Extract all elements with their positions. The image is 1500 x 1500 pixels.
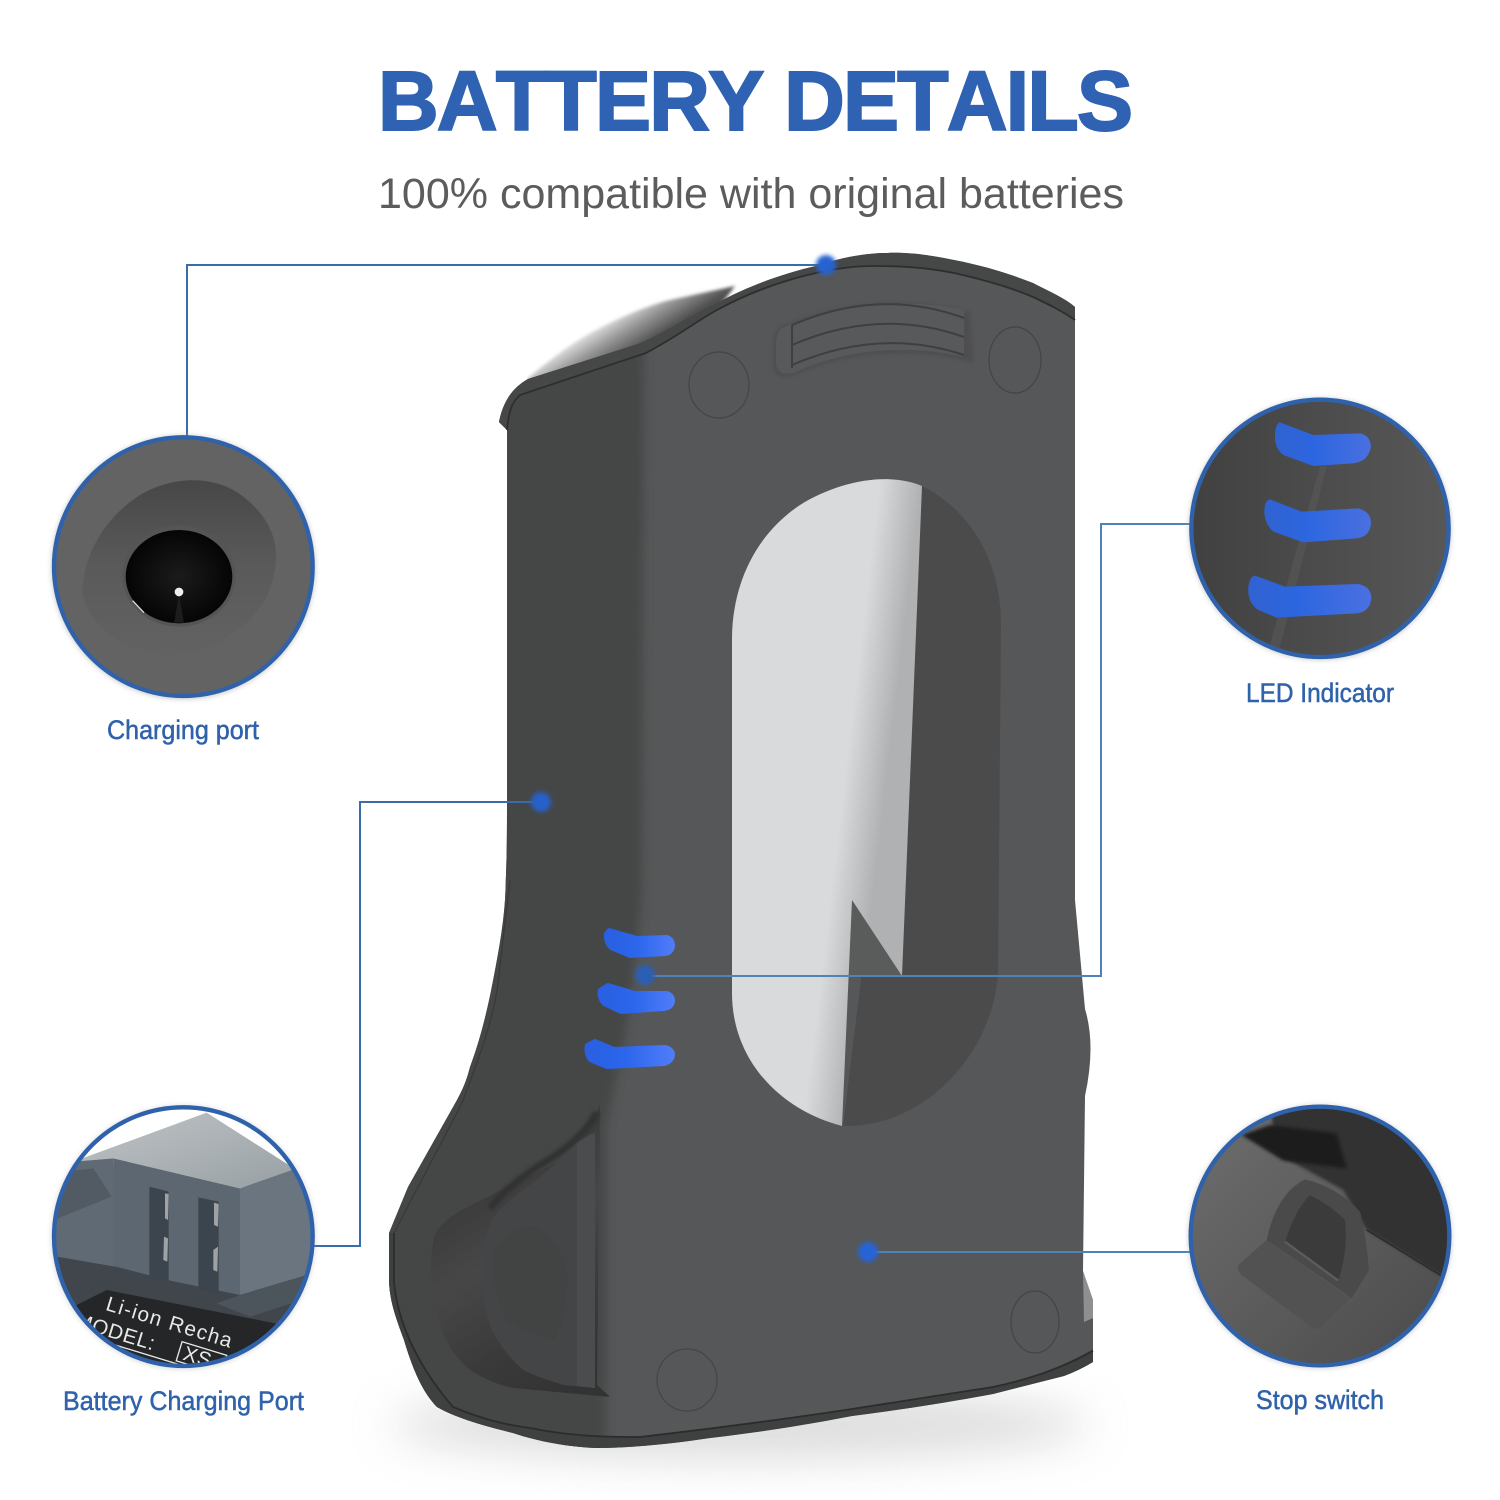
grip recess [431, 1105, 610, 1397]
detail circle: battery charging port: V [95, 1344, 115, 1370]
slot left [149, 1187, 169, 1281]
lower right step [217, 1276, 304, 1316]
switch loop [1267, 1179, 1369, 1298]
left block [50, 1158, 115, 1267]
grip inner arc [494, 1227, 567, 1340]
label: battery charging port: Battery Charging Port [63, 1386, 304, 1416]
hotspot dot: top [816, 255, 836, 275]
screw covers [657, 327, 1059, 1411]
label: stop switch: Stop switch [1256, 1385, 1384, 1415]
upper dark housing [1270, 1108, 1448, 1276]
connector: front to stop switch [868, 1251, 1192, 1253]
base line [394, 1233, 1093, 1437]
grip shadow [490, 1112, 597, 1208]
connector: LED bars to LED indicator [645, 524, 1192, 976]
base band [389, 1278, 1093, 1448]
connector: side to battery charging port [312, 802, 540, 1246]
detail circle: stop switch [1187, 1103, 1463, 1370]
LED bars [586, 930, 673, 1067]
contacts housing top [73, 1113, 297, 1188]
window notch [846, 900, 902, 976]
detail circle: battery charging port [50, 1104, 317, 1371]
hotspot dot: side [531, 792, 551, 812]
label: LED indicator: LED Indicator [1246, 678, 1394, 708]
release tab [773, 303, 974, 377]
right lower bevel [1083, 1271, 1093, 1322]
detail circle: LED indicator [1187, 397, 1453, 663]
detail circle: charging port [50, 433, 317, 700]
connector: top rim to charging port [187, 265, 826, 437]
floor shadow [390, 1390, 1090, 1460]
side line [394, 880, 510, 1233]
detail circle: battery charging port: Li-ion Recha [103, 1292, 236, 1353]
detail circle: battery charging port: XS [180, 1342, 215, 1373]
window dark half [843, 486, 1001, 1126]
rim band [499, 252, 1075, 430]
detail circle: battery charging port: 35 [141, 1358, 169, 1387]
switch recess [1238, 1240, 1312, 1310]
label plate [76, 1290, 276, 1364]
detail circle: battery charging port: MODEL: [72, 1309, 158, 1355]
slot right [198, 1197, 219, 1293]
label: charging port: Charging port [107, 715, 259, 745]
right face [240, 1170, 310, 1295]
hotspot dot: LED [635, 965, 655, 985]
side face [380, 340, 644, 1460]
grip panel [483, 1133, 595, 1388]
subtitle: 100% compatible with original batteries [378, 170, 1124, 218]
hotspot dot: front [858, 1242, 878, 1262]
floor [58, 1256, 304, 1324]
battery body [380, 200, 1110, 1480]
title: BATTERY DETAILS [378, 54, 1133, 148]
battery illustration [380, 200, 1110, 1480]
top surface highlight [528, 286, 735, 385]
rim line [507, 266, 1075, 430]
front face [113, 1158, 240, 1295]
window light half [732, 479, 922, 1126]
grip strip [577, 1133, 595, 1388]
